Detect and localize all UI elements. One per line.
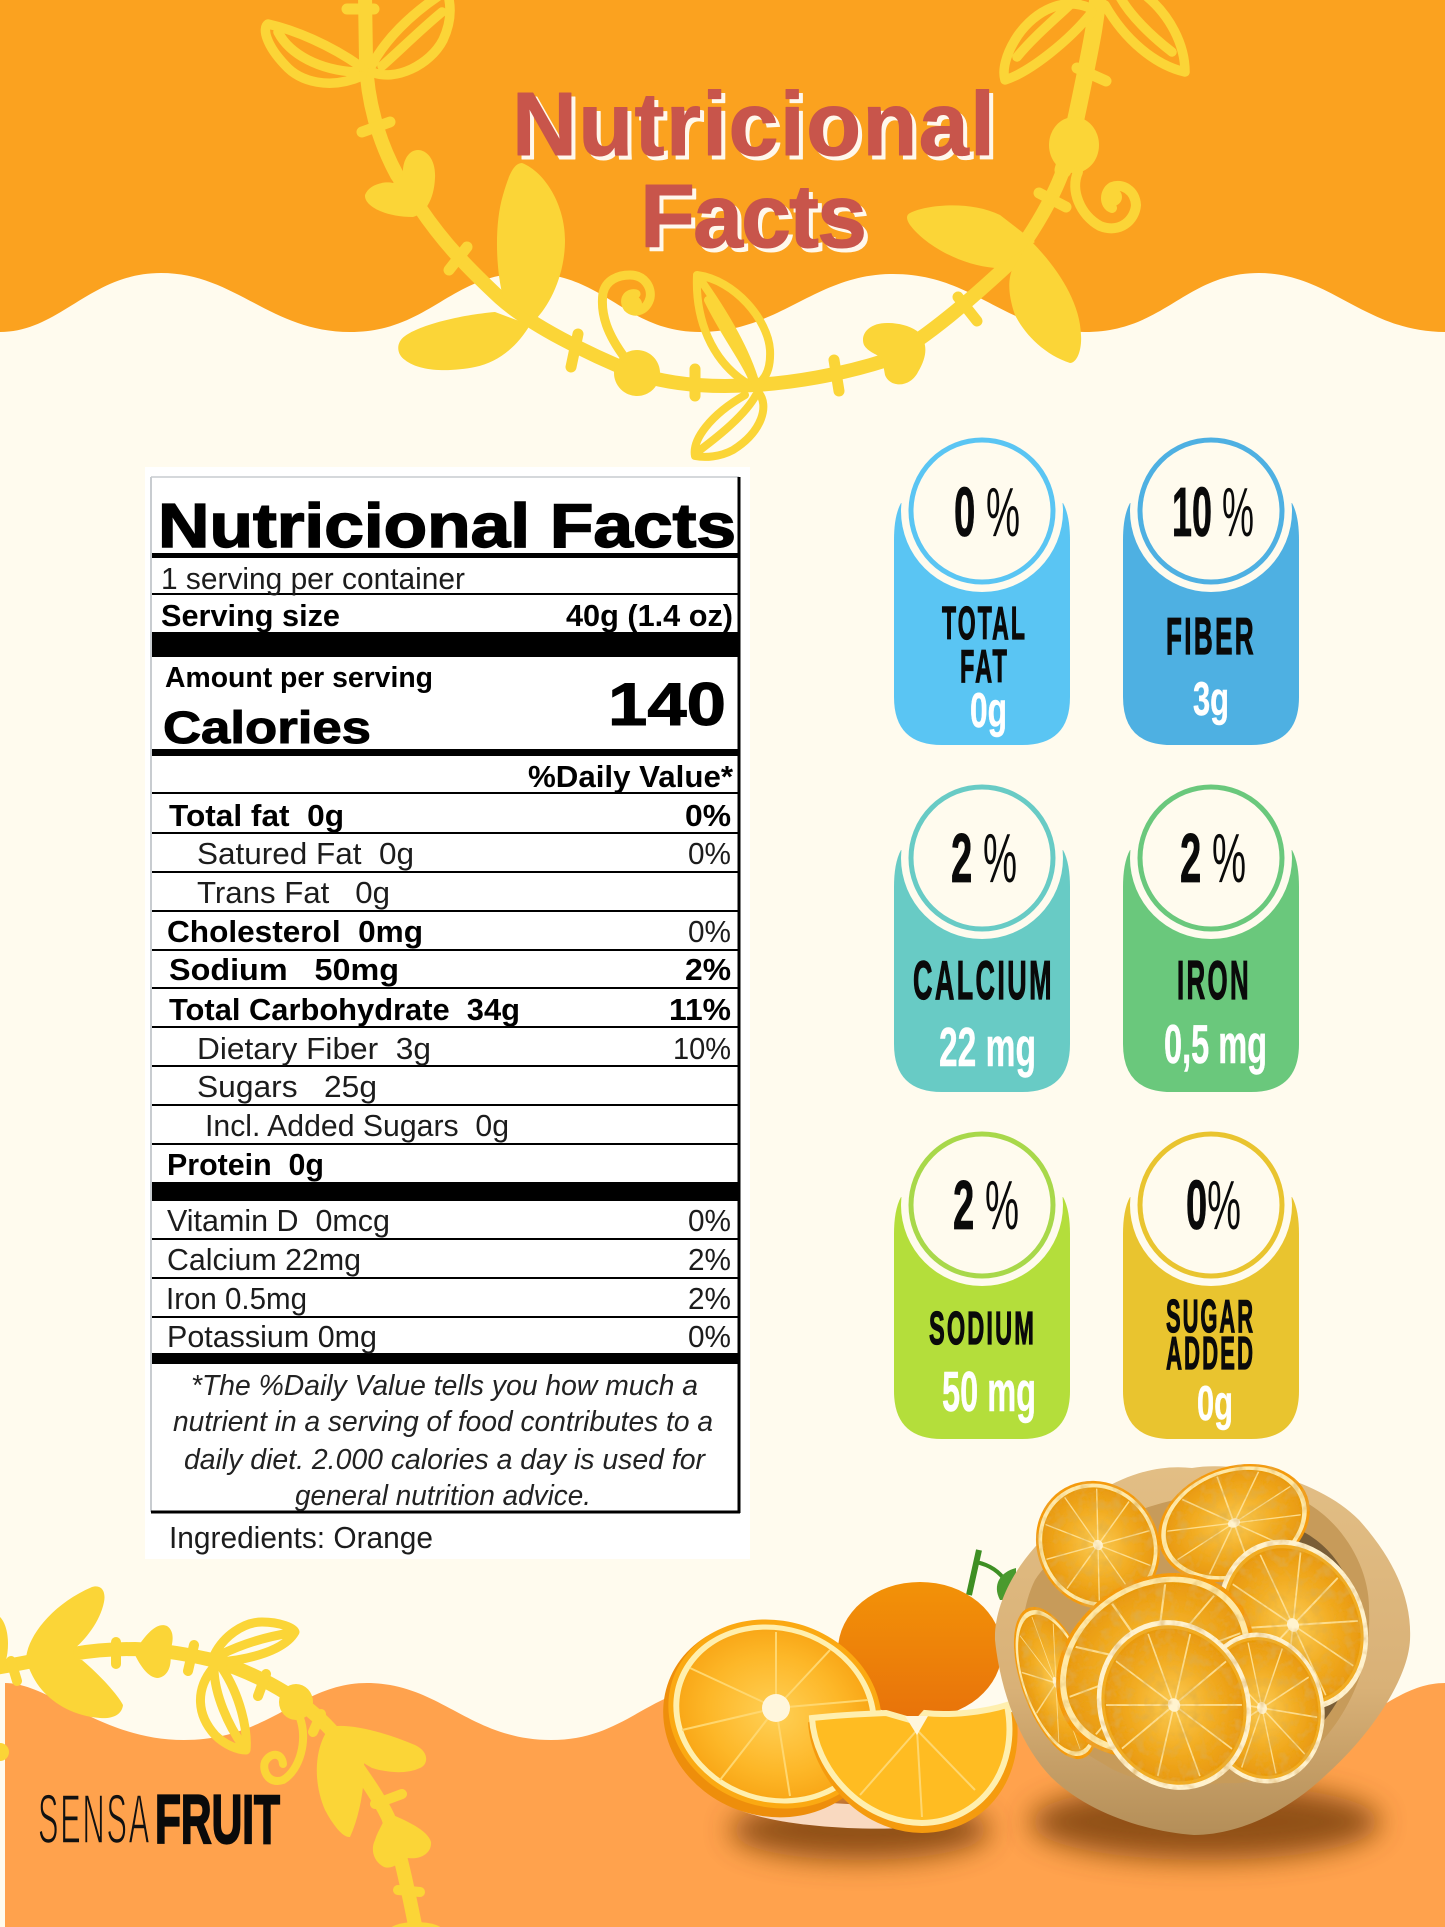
shadow under fresh oranges: [730, 1800, 990, 1860]
bottom vine: main stem: [0, 1649, 416, 1927]
title lettering: [512, 75, 995, 267]
title shadow: [516, 79, 999, 271]
row: total carbohydrate: [169, 992, 731, 1027]
bottom vine: curl: [264, 1718, 303, 1781]
bottom vine: left solid leaves: [0, 1586, 123, 1761]
badge: fiber: [1123, 430, 1299, 745]
badge: sodium: [894, 1124, 1070, 1439]
calories: 140: [608, 671, 726, 738]
title: [512, 75, 999, 271]
badge: total fat: 0 %: [954, 473, 1020, 551]
vine: oval bud right: [1049, 117, 1099, 173]
title lettering: Nutricional: [512, 75, 995, 175]
badge: total fat: [894, 430, 1070, 745]
badge: sugar added: ADDED: [1166, 1327, 1255, 1379]
badge: calcium: 22 mg: [939, 1016, 1036, 1078]
daily value header: %Daily Value*: [528, 759, 734, 794]
vine: round bud: [614, 350, 660, 396]
row: sodium: 2%: [685, 952, 731, 987]
row: potassium: Potassium 0mg: [167, 1319, 377, 1354]
ingredients: Ingredients: Orange: [169, 1520, 433, 1555]
footnote: general nutrition advice.: [295, 1480, 591, 1512]
calories: Calories: [163, 702, 371, 753]
wooden bowl: [995, 1466, 1410, 1835]
footnote: daily diet. 2.000 calories a day is used for: [184, 1444, 706, 1476]
badge: calcium: CALCIUM: [913, 949, 1054, 1011]
badge: iron: 2 %: [1180, 819, 1246, 897]
badge: fiber: 3g: [1193, 672, 1229, 725]
whole orange: [838, 1582, 1002, 1718]
row: calcium: [167, 1242, 731, 1277]
vine: centre outlined leaves: [695, 275, 770, 457]
row: added sugars: Incl. Added Sugars 0g: [205, 1108, 509, 1143]
row: protein: Protein 0g: [167, 1147, 324, 1182]
row: total carbohydrate: Total Carbohydrate 34g: [169, 992, 520, 1027]
row: saturated fat: Satured Fat 0g: [197, 836, 414, 871]
row: calcium: Calcium 22mg: [167, 1242, 361, 1277]
badge: total fat: 0g: [970, 684, 1007, 738]
badge: sodium: 2 %: [953, 1166, 1019, 1244]
bottom vine: leaf tip at edge: [388, 1922, 444, 1927]
vine: top-right outlined leaves: [1004, 0, 1185, 80]
row: dietary fiber: [197, 1031, 731, 1066]
row: saturated fat: [197, 836, 731, 871]
bottom vine: lower heart bud: [373, 1813, 431, 1868]
row: vitamin d: [167, 1203, 731, 1238]
badge: sodium: SODIUM: [929, 1302, 1036, 1354]
row: sodium: Sodium 50mg: [169, 952, 399, 987]
row: sodium: [169, 952, 731, 987]
badge: total fat: TOTAL: [942, 597, 1027, 649]
row: iron: 2%: [688, 1281, 731, 1316]
footnote: [173, 1370, 713, 1512]
row: potassium: 0%: [688, 1319, 731, 1354]
label rules: [152, 553, 738, 1364]
row: trans fat: Trans Fat 0g: [197, 875, 390, 910]
badge: sugar added: SUGAR: [1166, 1290, 1255, 1342]
row: dietary fiber: 10%: [673, 1031, 731, 1066]
shadow under bowl: [1030, 1784, 1380, 1860]
bottom orange wavy band: [5, 1683, 1445, 1927]
bottom vine: outlined leaves: [200, 1622, 295, 1750]
badge: sugar added: 0g: [1197, 1377, 1233, 1431]
row: vitamin d: Vitamin D 0mcg: [167, 1203, 390, 1238]
row: total fat: [169, 798, 731, 833]
label frame: [151, 477, 740, 1513]
vine: large solid leaf lower: [398, 312, 530, 370]
serving size: 40g (1.4 oz): [566, 598, 733, 633]
badge: sodium: 50 mg: [942, 1360, 1036, 1424]
vine: heart bud left: [365, 150, 435, 217]
row: sugars: Sugars 25g: [197, 1069, 377, 1104]
vine: small cross bars: [347, 9, 1106, 396]
vine: main stem: [365, 0, 1065, 386]
label heading: Nutricional Facts: [158, 492, 736, 561]
row: total fat: Total fat 0g: [169, 798, 344, 833]
brand logo: SENSA: [38, 1780, 151, 1858]
badge: total fat: FAT: [960, 640, 1009, 692]
title shadow: Nutricional: [516, 79, 999, 179]
bottom vine: round bud: [279, 1684, 313, 1720]
badge: iron: IRON: [1177, 949, 1251, 1011]
row: potassium: [167, 1319, 731, 1354]
footnote: nutrient in a serving of food contributes to a: [173, 1406, 713, 1438]
row: cholesterol: Cholesterol 0mg: [167, 914, 423, 949]
bottom decorative vine: [0, 1586, 444, 1927]
bottom vine: cross bars: [11, 1642, 420, 1892]
row: vitamin d: 0%: [688, 1203, 731, 1238]
vine: large solid leaf right lower: [1009, 240, 1081, 363]
bottom vine: large leaves: [317, 1726, 426, 1837]
top orange wavy banner: [0, 0, 1445, 332]
vine: curl left: [602, 275, 650, 358]
top decorative vine: [265, 0, 1185, 457]
badge: sugar added: [1123, 1124, 1299, 1439]
title lettering: Facts: [640, 167, 867, 267]
row: cholesterol: 0%: [688, 914, 731, 949]
plate remnant: [732, 1800, 965, 1829]
vine: large solid leaf upper: [497, 163, 565, 320]
badge: iron: [1123, 777, 1299, 1092]
brand logo: FRUIT: [155, 1781, 280, 1858]
row: saturated fat: 0%: [688, 836, 731, 871]
row: total carbohydrate: 11%: [669, 992, 731, 1027]
vine: large solid leaf right upper: [907, 205, 1035, 268]
row: cholesterol: [167, 914, 731, 949]
vine: curl right: [1075, 172, 1136, 228]
badge: fiber: 10 %: [1172, 473, 1254, 551]
vine: heart bud right: [863, 323, 925, 384]
bottom vine: heart bud: [135, 1625, 173, 1678]
label paper: [145, 467, 750, 1559]
row: iron: [166, 1281, 731, 1316]
badge: calcium: [894, 777, 1070, 1092]
row: dietary fiber: Dietary Fiber 3g: [197, 1031, 431, 1066]
badge: fiber: FIBER: [1166, 608, 1256, 666]
vine: upper right stem: [1063, 0, 1098, 170]
footnote: *The %Daily Value tells you how much a: [191, 1370, 698, 1402]
row: calcium: 2%: [688, 1242, 731, 1277]
row: iron: Iron 0.5mg: [166, 1281, 307, 1316]
badge: iron: 0,5 mg: [1164, 1013, 1267, 1075]
badge: calcium: 2 %: [951, 819, 1017, 897]
orange half: [637, 1592, 907, 1845]
dried orange slices: [997, 1444, 1395, 1812]
title shadow: Facts: [644, 171, 871, 271]
amount per serving: Amount per serving: [165, 662, 433, 694]
orange stem and leaf: [969, 1550, 1016, 1600]
orange wedge: [812, 1705, 1014, 1829]
panel: nutrition facts label: [145, 467, 750, 1559]
calories: [163, 671, 726, 753]
serving size: [161, 598, 733, 633]
servings per container: 1 serving per container: [161, 561, 465, 596]
row: total fat: 0%: [685, 798, 731, 833]
vine: top-left outlined leaves: [265, 0, 450, 83]
badge: sugar added: 0%: [1186, 1166, 1241, 1244]
serving size: Serving size: [161, 598, 340, 633]
fresh oranges photo illustration: [637, 1444, 1410, 1860]
